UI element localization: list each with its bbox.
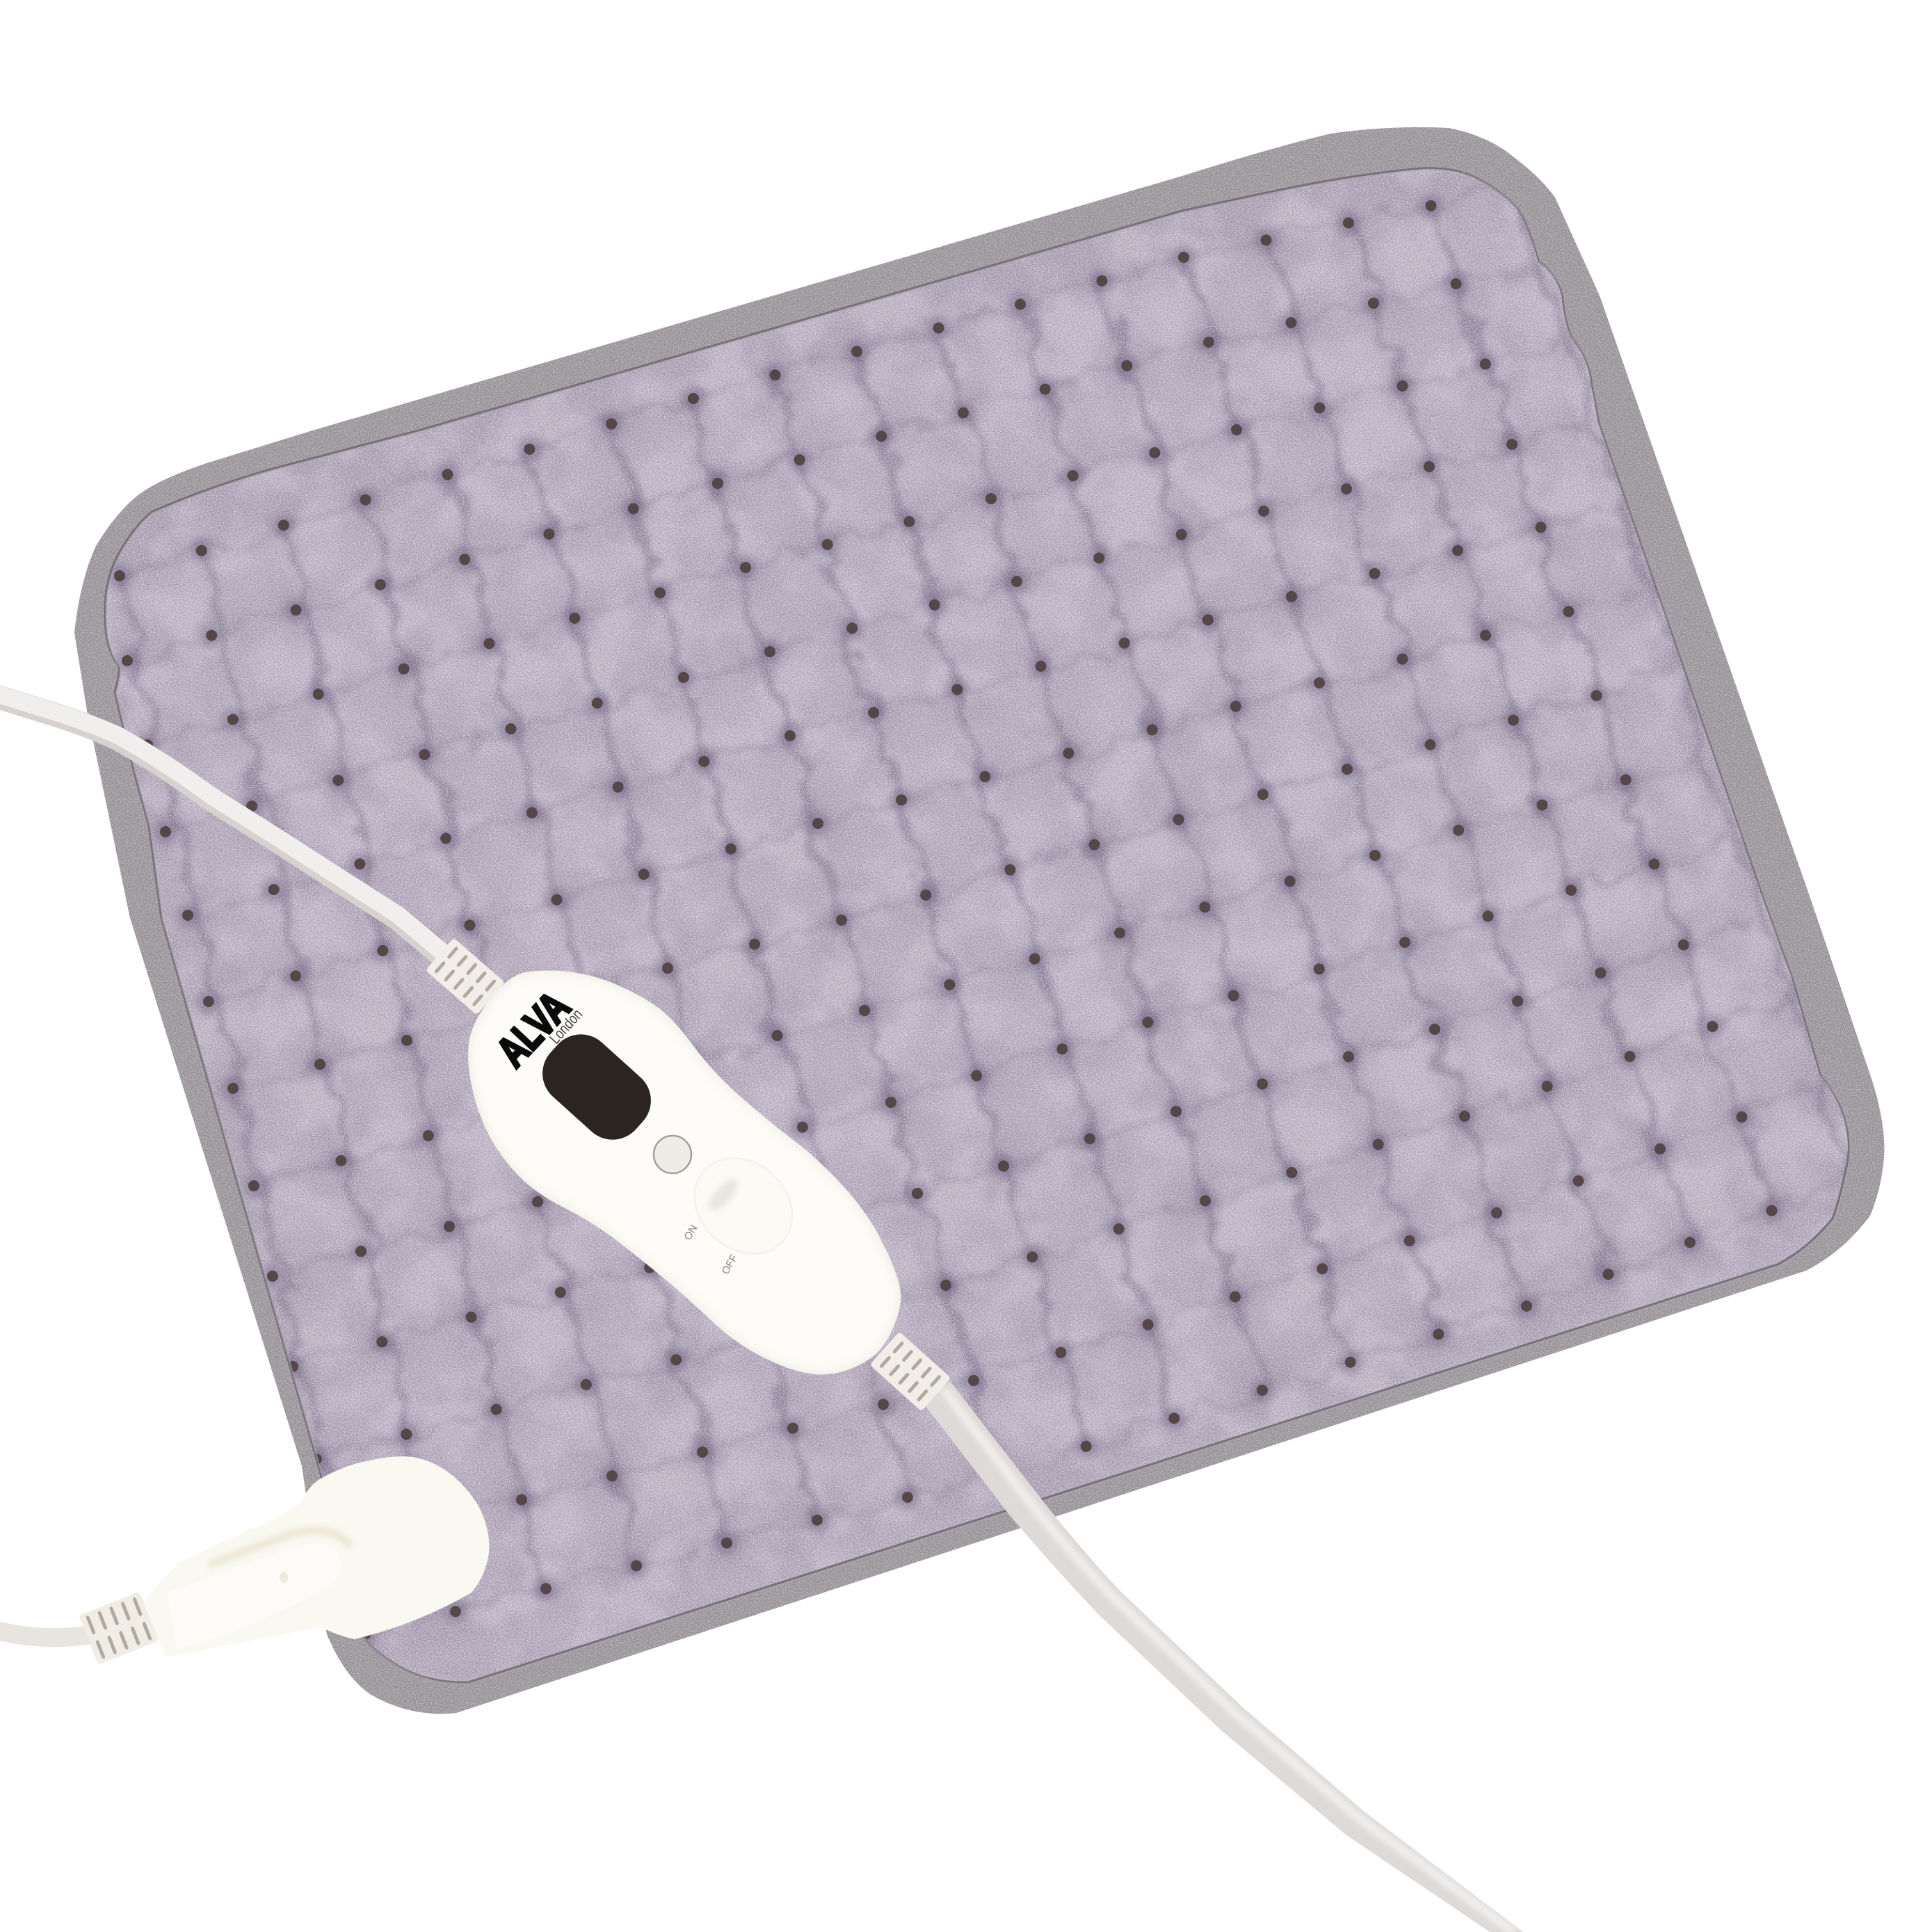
- quilting seams: [120, 188, 1853, 1634]
- brand sub-logo London: London: [546, 1006, 586, 1047]
- strain relief: controller top: [426, 937, 505, 1015]
- pad plush quilted surface: [105, 168, 1849, 1682]
- quilting dots grid: [120, 188, 1853, 1634]
- round button: [654, 1136, 691, 1173]
- plug hole: [280, 1572, 288, 1583]
- strain relief: controller bottom: [869, 1332, 951, 1411]
- cord: lower long cable: [924, 1381, 1523, 1932]
- switch label ON: ON: [682, 1223, 700, 1242]
- strain relief: plug: [79, 1591, 159, 1665]
- switch label OFF: OFF: [720, 1253, 740, 1276]
- pad outer grey border: [74, 127, 1885, 1714]
- brand logo ALVA: ALVA: [488, 983, 579, 1076]
- controller body: [468, 971, 901, 1374]
- plug clip shadow: [209, 1530, 351, 1565]
- slider recess: [675, 1138, 812, 1273]
- pillow highlights: [132, 177, 1895, 1677]
- quilting dots halo: [120, 188, 1853, 1634]
- connector plug: [145, 1456, 489, 1657]
- plug clip tab: [167, 1543, 341, 1648]
- cord: plug side cable: [0, 1629, 94, 1638]
- cord: upper left power cable: [0, 693, 446, 958]
- border piping seam: [105, 168, 1850, 1684]
- slider knob ridge: [704, 1175, 743, 1215]
- display screen: [530, 1022, 663, 1152]
